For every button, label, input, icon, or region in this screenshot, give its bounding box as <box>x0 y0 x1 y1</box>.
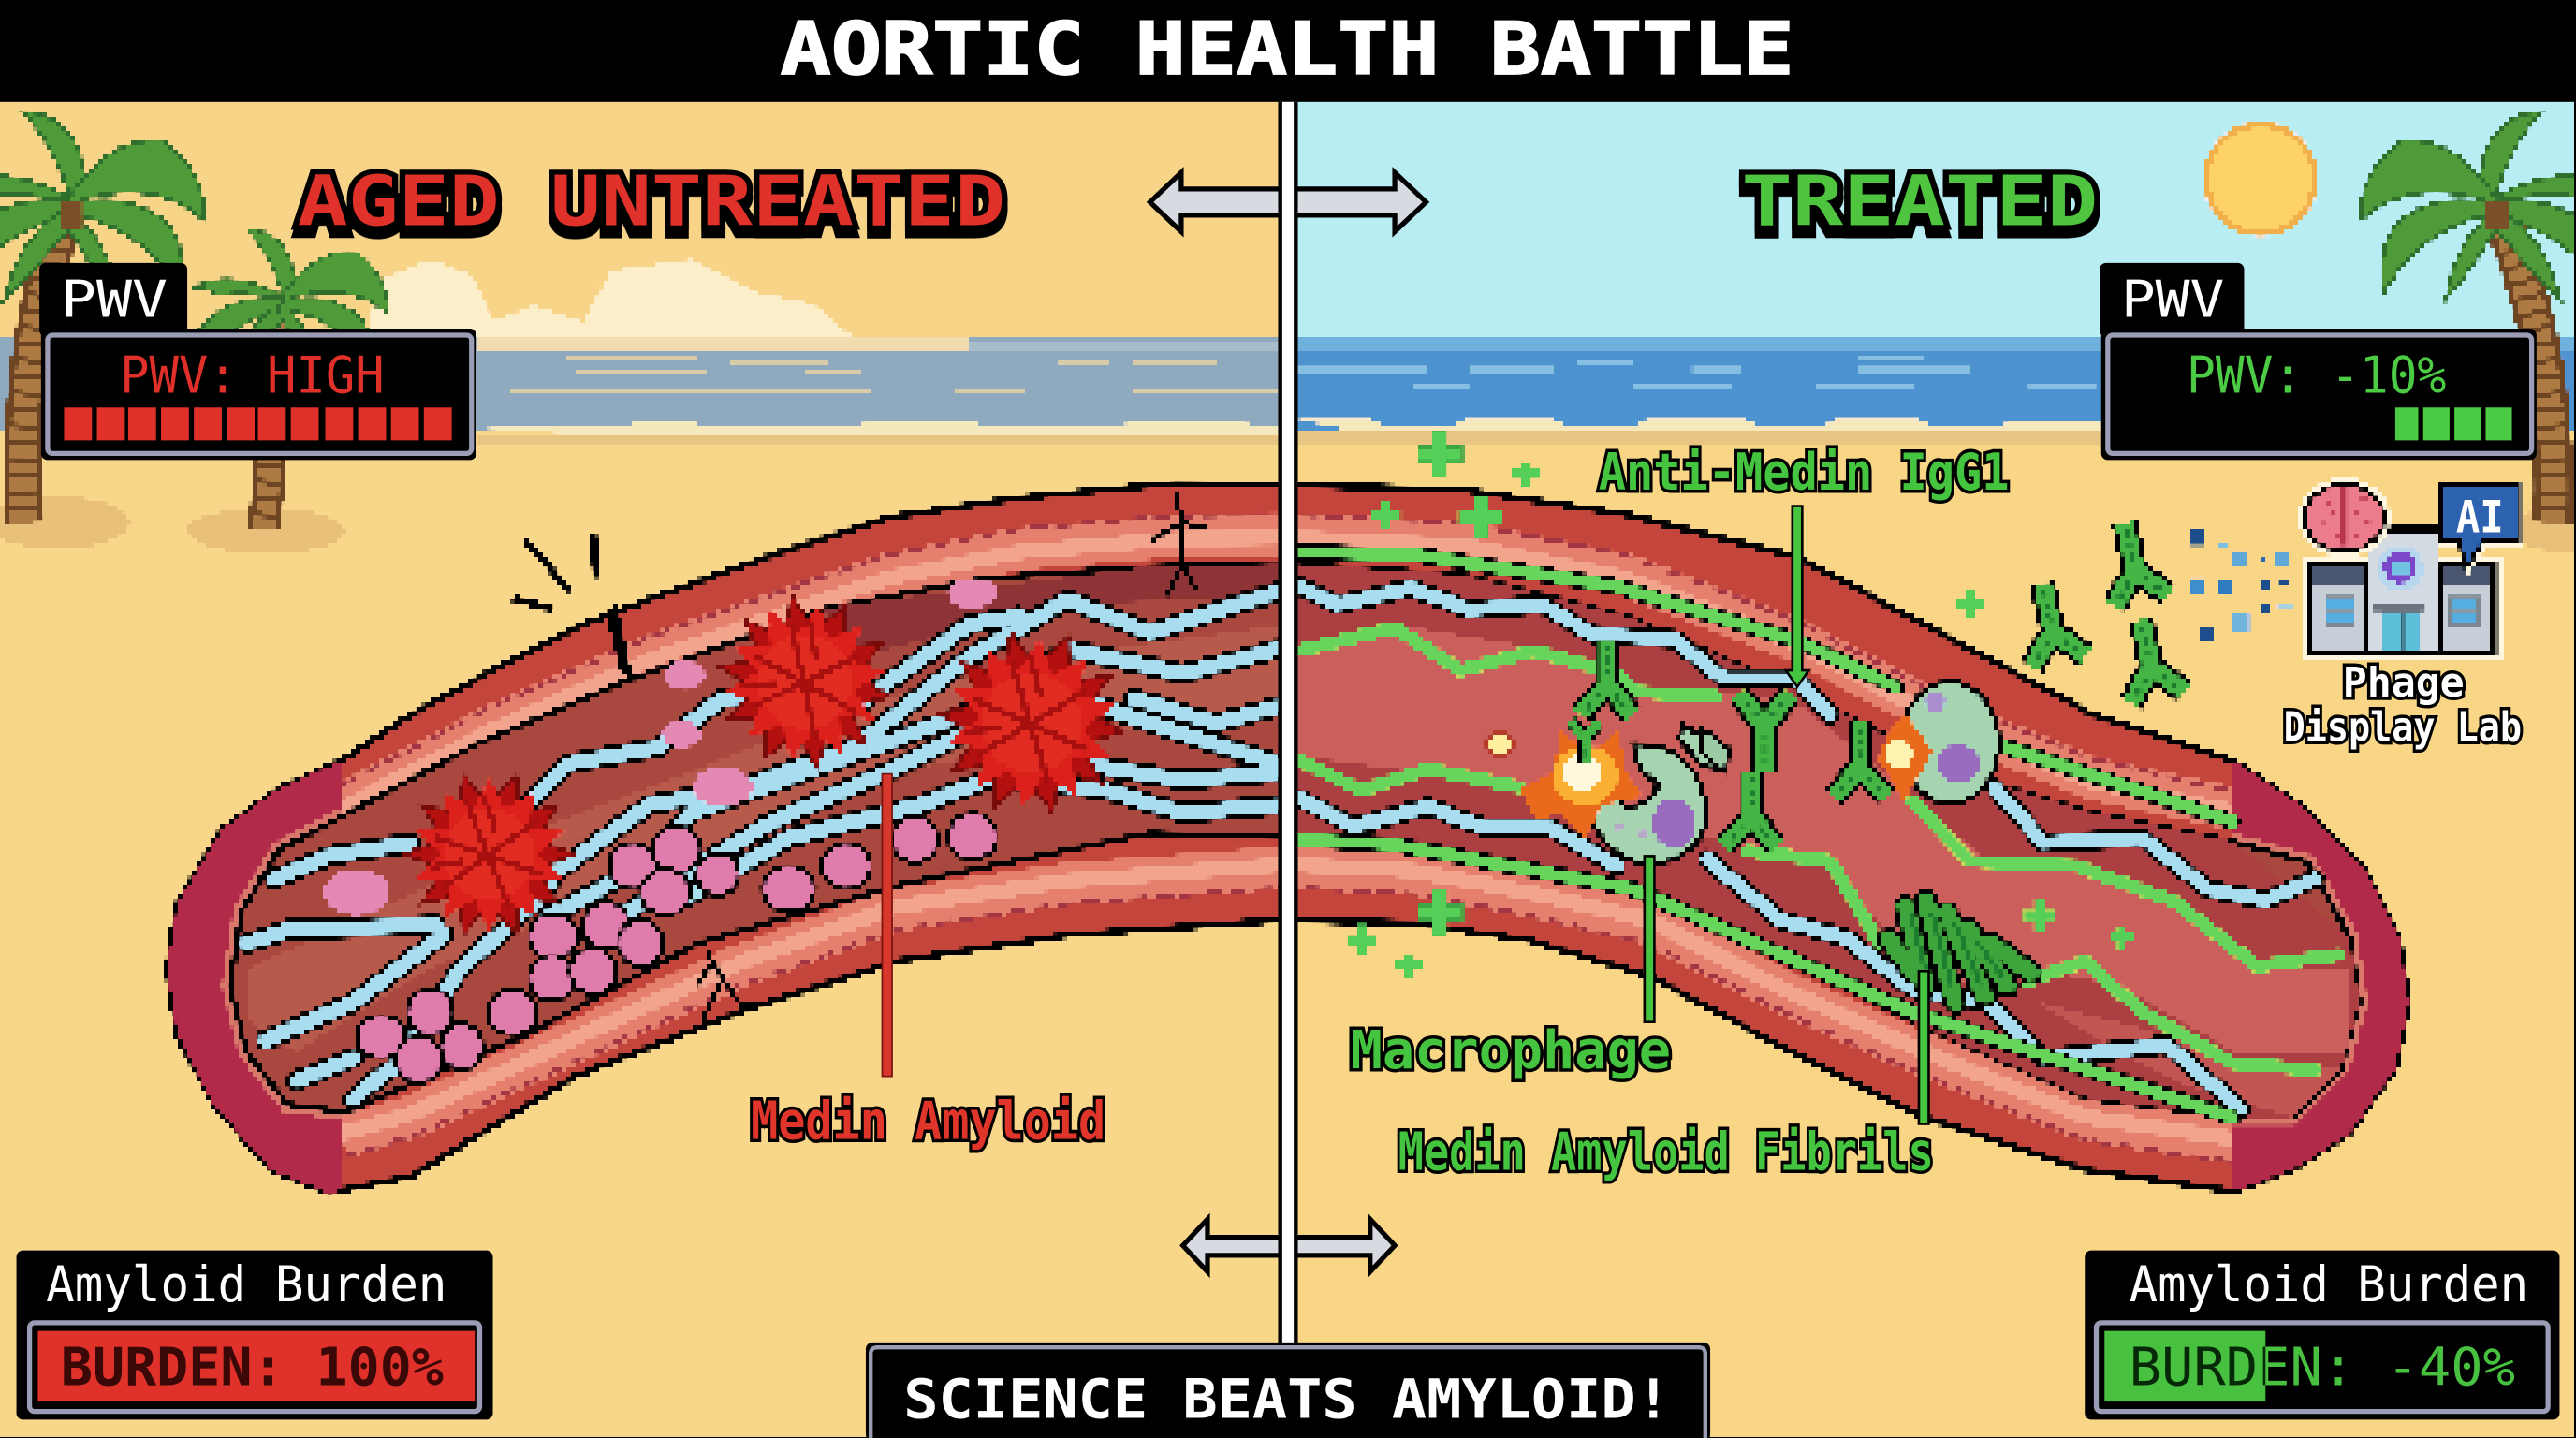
cloud <box>370 259 855 339</box>
icon: brain <box>2298 478 2391 557</box>
panel: amyloid burden untreated: BURDEN: 100% <box>61 1338 444 1399</box>
palm tree: right <box>2361 111 2576 552</box>
bottom double arrow <box>1183 1219 1395 1271</box>
green antibodies in lumen <box>1571 639 1886 846</box>
panel: PWV gauge untreated <box>39 263 475 459</box>
callout: anti-medin IgG1: Anti-Medin IgG1 <box>1599 443 2009 502</box>
heading: aged untreated: AGED UNTREATED <box>298 162 1005 242</box>
aorta cross-section <box>168 483 2408 1193</box>
panel: treated beach background <box>1288 98 2576 1438</box>
callout: medin amyloid fibrils: Medin Amyloid Fibrils <box>1398 1123 1934 1183</box>
palm tree: left small <box>187 229 388 553</box>
lumen shading <box>246 564 2359 1117</box>
green medin amyloid fibrils clump <box>1889 901 2030 1003</box>
banner: science beats amyloid <box>866 1343 1710 1438</box>
central divider <box>1278 102 1298 1347</box>
panel: PWV gauge treated: PWV <box>2121 271 2224 330</box>
callout: macrophage <box>1351 856 1671 1081</box>
green sparkle plus marks <box>1347 433 2134 977</box>
loose pink blobs <box>324 579 997 916</box>
header bar <box>0 0 2576 102</box>
pink cell clusters <box>357 814 997 1083</box>
debris <box>1702 728 1730 772</box>
sea <box>1288 339 2576 444</box>
panel: aged untreated beach background <box>0 98 1397 1438</box>
callout: medin amyloid <box>751 774 1105 1152</box>
panel: amyloid burden treated: BURDEN: -40% <box>2130 1338 2515 1399</box>
sea <box>0 339 1397 446</box>
panel: PWV gauge treated: PWV: -10% <box>2187 345 2446 404</box>
macrophage engulfing right <box>1901 682 1999 803</box>
red medin amyloid clusters <box>392 568 1148 949</box>
cracks and impact marks <box>513 492 1208 1022</box>
outer wall <box>168 483 2408 1193</box>
top double arrow <box>1150 172 1426 231</box>
palm tree: left large <box>0 111 204 549</box>
panel: amyloid burden treated: BURDEN: -40% <box>2130 1338 2515 1399</box>
PWV bar high <box>64 407 452 440</box>
callout: anti-medin IgG1 <box>1599 443 2009 687</box>
callout: medin amyloid: Medin Amyloid <box>751 1091 1105 1152</box>
title: AORTIC HEALTH BATTLE <box>781 7 1794 92</box>
end caps <box>168 564 2408 1193</box>
sun <box>2206 125 2315 233</box>
AI label: AI <box>2456 492 2504 544</box>
blue fibres, untreated <box>246 592 1278 1099</box>
panel: PWV gauge treated <box>2100 263 2535 459</box>
treated fibres <box>1299 552 2339 1117</box>
phage display lab building <box>2302 522 2502 661</box>
macrophage engulfing left <box>1589 723 1717 865</box>
lumen <box>230 564 2359 1117</box>
panel: amyloid burden treated: Amyloid Burden <box>2130 1256 2528 1313</box>
panel: amyloid burden untreated: Amyloid Burden <box>46 1256 446 1313</box>
callout: medin amyloid fibrils <box>1398 971 1934 1183</box>
explosions <box>1484 714 1932 838</box>
PWV bar reduced <box>2395 407 2512 440</box>
callout: macrophage: Macrophage <box>1351 1020 1671 1081</box>
panel: amyloid burden untreated <box>17 1251 493 1419</box>
heading: treated: TREATED <box>1741 162 2098 242</box>
label: phage display lab <box>2284 659 2522 752</box>
label: phage display lab: Display Lab <box>2284 704 2522 752</box>
macrophage cells <box>1589 682 1999 865</box>
panel: PWV gauge untreated: PWV <box>61 271 168 330</box>
free antibodies drifting from lab <box>2015 518 2185 703</box>
icon: AI bubble base <box>2438 481 2522 575</box>
wall stripes <box>342 514 2232 1162</box>
panel: amyloid burden treated <box>2085 1251 2559 1419</box>
banner: science beats amyloid: SCIENCE BEATS AMYLOID! <box>903 1368 1671 1431</box>
label: phage display lab: Phage <box>2343 659 2465 707</box>
phage particles <box>2190 531 2293 642</box>
panel: PWV gauge untreated: PWV: HIGH <box>120 345 385 404</box>
